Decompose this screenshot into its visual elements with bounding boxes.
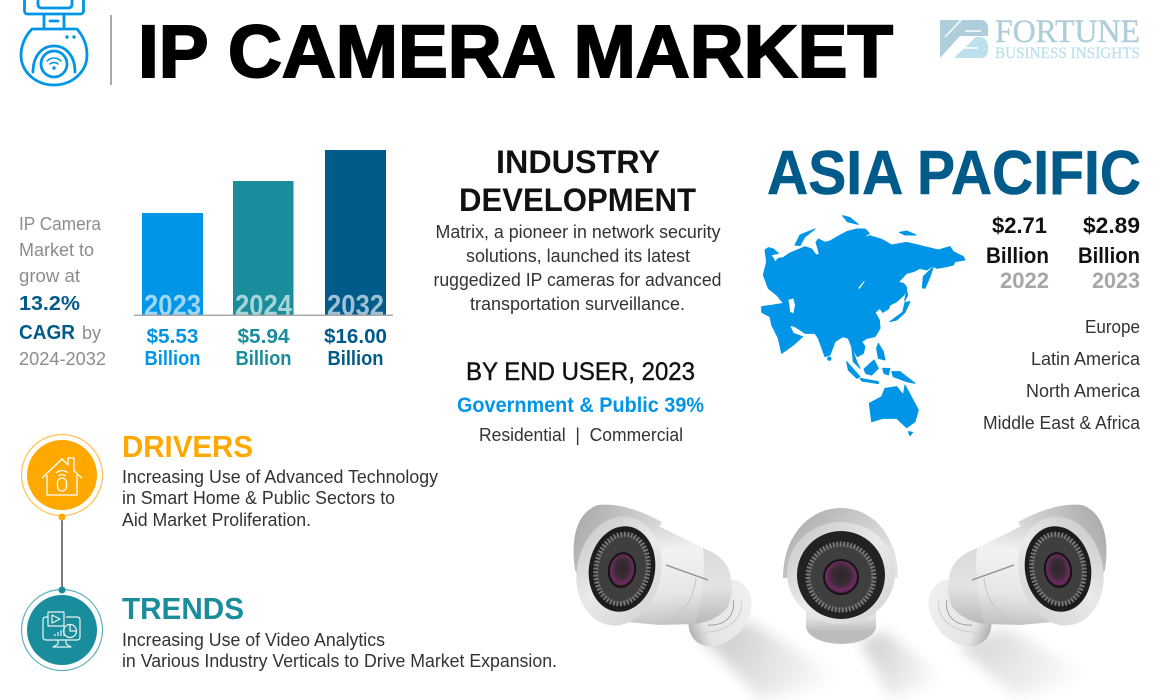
text: trends: TRENDS xyxy=(122,591,244,626)
other regions list xyxy=(983,317,1141,433)
text block: solutions, launched its latest xyxy=(466,246,690,266)
bar 2032: 2032 xyxy=(327,290,384,322)
text block: Matrix, a pioneer in network security xyxy=(436,222,720,242)
icon: IP camera xyxy=(21,0,87,85)
bar 2023: 2023 xyxy=(144,290,201,322)
text: drivers: Aid Market Proliferation. xyxy=(122,510,311,530)
icon: drivers smart home xyxy=(22,434,102,520)
text: drivers: DRIVERS xyxy=(122,429,253,464)
value 2022: 2022 xyxy=(1000,268,1049,293)
heading: INDUSTRY xyxy=(496,144,660,180)
bar 2024: $5.94 xyxy=(238,326,290,348)
bar 2032: $16.00 xyxy=(324,326,387,348)
CAGR text block: IP Camera xyxy=(19,214,102,234)
logo: Fortune Business Insights: FORTUNE xyxy=(995,14,1140,50)
text block xyxy=(434,222,722,314)
icon: trends video analytics xyxy=(22,586,102,670)
value 2022: $2.71 xyxy=(992,213,1047,238)
text: trends: Increasing Use of Video Analytics xyxy=(122,630,385,650)
illustration: right camera xyxy=(916,505,1114,659)
other regions list: North America xyxy=(1026,381,1141,401)
CAGR text block: 13.2% xyxy=(19,293,80,315)
other regions list: Middle East & Africa xyxy=(983,413,1141,433)
bar 2024: Billion xyxy=(236,348,292,370)
other regions list: Latin America xyxy=(1031,349,1141,369)
CAGR text block: 2024-2032 xyxy=(19,349,106,369)
bar 2032: Billion xyxy=(328,348,384,370)
CAGR text block xyxy=(19,214,106,369)
heading: DEVELOPMENT xyxy=(459,182,696,218)
panel: by end user: Government & Public 39% xyxy=(457,394,704,417)
camera shadows xyxy=(695,622,1095,698)
panel: by end user xyxy=(457,358,704,445)
text block: transportation surveillance. xyxy=(470,294,685,314)
regional values xyxy=(986,213,1140,293)
text: drivers: in Smart Home & Public Sectors to xyxy=(122,488,395,508)
bar 2024 xyxy=(233,181,294,370)
text: trends: in Various Industry Verticals to Drive Market Expansion. xyxy=(122,651,557,671)
CAGR text block: Market to xyxy=(19,240,94,260)
panel: industry development xyxy=(434,144,722,314)
panel: by end user: BY END USER, 2023 xyxy=(466,358,695,386)
logo: Fortune Business Insights xyxy=(940,14,1140,62)
bar chart: market size xyxy=(134,150,393,370)
text: trends xyxy=(122,591,557,671)
illustration: centre camera xyxy=(783,508,898,644)
bar 2023 xyxy=(142,213,203,370)
CAGR text block: by xyxy=(82,323,101,343)
heading xyxy=(459,144,696,218)
other regions list: Europe xyxy=(1085,317,1140,337)
logo: Fortune Business Insights: BUSINESS INSIGHTS xyxy=(995,45,1140,62)
value 2023: Billion xyxy=(1078,243,1140,268)
illustration: left camera xyxy=(566,505,764,659)
map: Asia Pacific xyxy=(762,216,965,436)
value 2023 xyxy=(1078,213,1140,293)
panel: by end user: Residential | Commercial xyxy=(479,425,683,445)
CAGR text block: CAGR xyxy=(19,322,76,344)
bar 2023: $5.53 xyxy=(146,326,198,348)
connector xyxy=(61,517,63,590)
value 2023: $2.89 xyxy=(1083,213,1140,238)
value 2022 xyxy=(986,213,1049,293)
bar 2024: 2024 xyxy=(235,290,292,322)
title: IP CAMERA MARKET xyxy=(138,10,893,93)
text block: ruggedized IP cameras for advanced xyxy=(434,270,722,290)
bar 2023: Billion xyxy=(144,348,200,370)
bar 2032 xyxy=(324,150,387,370)
CAGR text block: grow at xyxy=(19,266,80,286)
text: drivers: Increasing Use of Advanced Technology xyxy=(122,467,438,487)
text: drivers xyxy=(122,429,438,530)
value 2023: 2023 xyxy=(1092,268,1140,293)
value 2022: Billion xyxy=(986,243,1049,268)
